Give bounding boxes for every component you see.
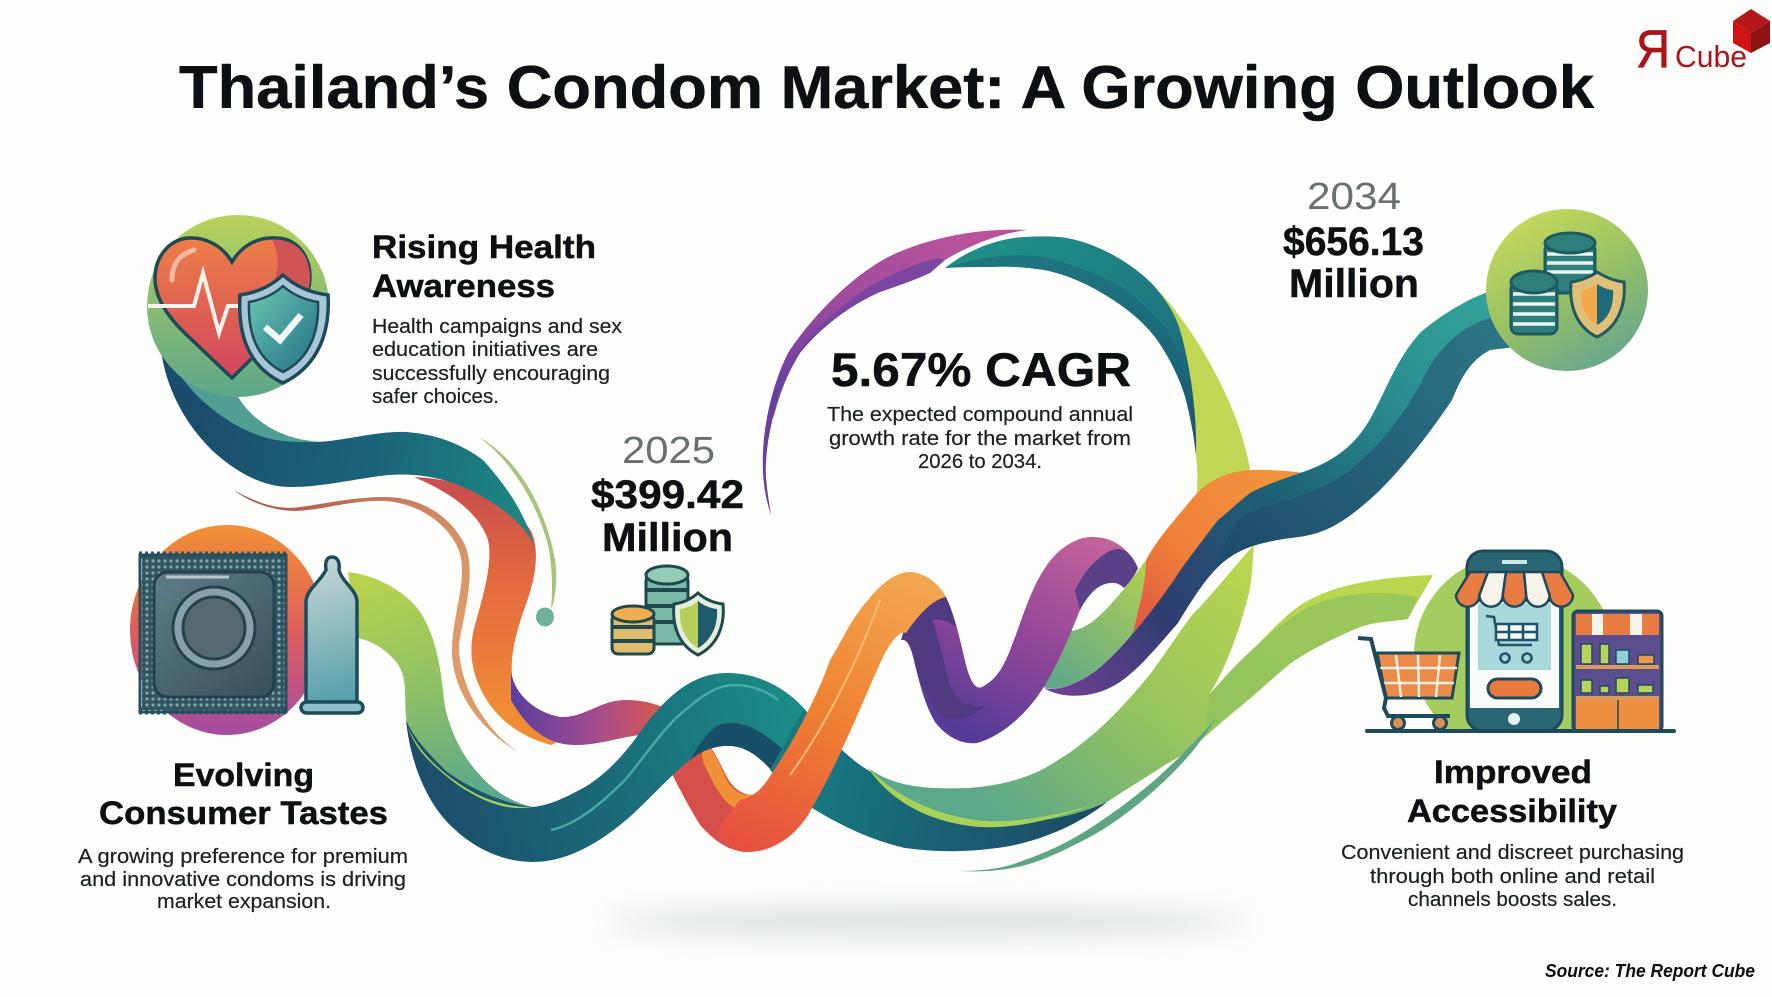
- icon: store, phone and cart: [1358, 551, 1674, 755]
- logo: RCube: Cube: [1675, 39, 1747, 74]
- panel: 2034 value: [1283, 176, 1648, 371]
- ribbon highlight: lime edge: [408, 727, 533, 808]
- ribbon highlight: lime streak: [868, 768, 1095, 827]
- ribbon shade: purple right: [1075, 549, 1138, 610]
- ribbon: orange right: [1133, 470, 1305, 633]
- ribbon highlight: top-left: [170, 360, 320, 442]
- thin green curve lower: [959, 718, 1216, 871]
- ribbon: orange front: [716, 572, 946, 852]
- panel: evolving consumer tastes: [78, 525, 408, 913]
- value 2025: $399.42: [591, 473, 744, 517]
- logo: RCube: [1636, 9, 1770, 79]
- heading: Consumer Tastes: [99, 795, 388, 831]
- heading: Accessibility: [1407, 793, 1617, 829]
- green dot: [536, 608, 554, 626]
- panel: 2025 value: [591, 430, 744, 655]
- ribbon: green middle: [1042, 560, 1147, 688]
- ribbon: teal right: [770, 710, 1107, 851]
- ribbon highlight: teal stripe: [551, 685, 778, 830]
- ribbon: lime large: [868, 545, 1433, 825]
- CAGR description: The expected compound annual: [827, 403, 1133, 426]
- ribbon shade: purple arc inner band: [773, 258, 945, 420]
- icon: heart and shield: [147, 215, 329, 397]
- panel: CAGR: [827, 343, 1133, 473]
- flowing ribbons: [160, 230, 1514, 871]
- ribbon: orange back strand: [670, 735, 790, 852]
- ribbon: teal top-left: [160, 340, 534, 545]
- CAGR value: 5.67% CAGR: [831, 343, 1131, 396]
- description: safer choices.: [372, 385, 499, 408]
- title: Thailand’s Condom Market: A Growing Outlook: [179, 54, 1595, 121]
- description: Health campaigns and sex: [372, 315, 623, 338]
- heading: Improved: [1434, 754, 1592, 790]
- ribbon: purple tail: [511, 672, 680, 745]
- ribbon shade: navy lower band: [1218, 318, 1514, 567]
- icon: condom packet and condom: [130, 525, 363, 735]
- icon: coins and shield in circle: [1486, 209, 1648, 371]
- description: education initiatives are: [372, 338, 598, 361]
- icon: coins and shield: [612, 566, 723, 655]
- description: through both online and retail: [1370, 865, 1655, 888]
- description: successfully encouraging: [372, 362, 610, 385]
- ribbon highlight: orange stripe: [790, 600, 880, 775]
- thin green curve: [479, 437, 556, 610]
- description: A growing preference for premium: [78, 845, 408, 868]
- ribbon shade: right lime strand: [1205, 593, 1418, 735]
- ribbon: purple arc: [763, 230, 1027, 515]
- ribbon: navy to teal: [1044, 292, 1514, 696]
- year 2025: 2025: [622, 430, 715, 472]
- ribbon shade: purple left: [901, 595, 985, 720]
- ribbon: teal lower: [406, 673, 815, 862]
- description: market expansion.: [157, 890, 331, 913]
- panel: rising health awareness: [147, 215, 623, 408]
- CAGR description: growth rate for the market from: [829, 427, 1131, 450]
- source note: Source: The Report Cube: [1545, 961, 1755, 981]
- panel: improved accessibility: [1341, 551, 1684, 911]
- ground shadow: [605, 910, 1245, 934]
- year 2034: 2034: [1307, 176, 1401, 218]
- logo: RCube: Я: [1636, 20, 1670, 79]
- description: and innovative condoms is driving: [80, 868, 406, 891]
- thin orange curve: [234, 490, 521, 754]
- ribbon: orange left: [414, 477, 572, 745]
- ribbon underside: teal: [690, 723, 787, 773]
- description: Convenient and discreet purchasing: [1341, 841, 1684, 864]
- heading: Evolving: [173, 757, 314, 793]
- ribbon: lime left: [348, 572, 533, 807]
- value 2025: Million: [602, 516, 733, 560]
- value 2034: $656.13: [1283, 220, 1424, 264]
- ribbon: purple wave: [901, 537, 1138, 743]
- heading: Rising Health: [372, 229, 596, 265]
- ribbon: orange inner strand: [700, 738, 772, 809]
- CAGR description: 2026 to 2034.: [918, 450, 1042, 473]
- heading: Awareness: [372, 268, 555, 304]
- description: channels boosts sales.: [1408, 888, 1617, 911]
- ribbon: lime arc: [1155, 287, 1255, 515]
- ribbon: teal arc: [945, 236, 1196, 455]
- ribbon shade: teal arc inner band: [945, 255, 1196, 455]
- value 2034: Million: [1289, 262, 1419, 306]
